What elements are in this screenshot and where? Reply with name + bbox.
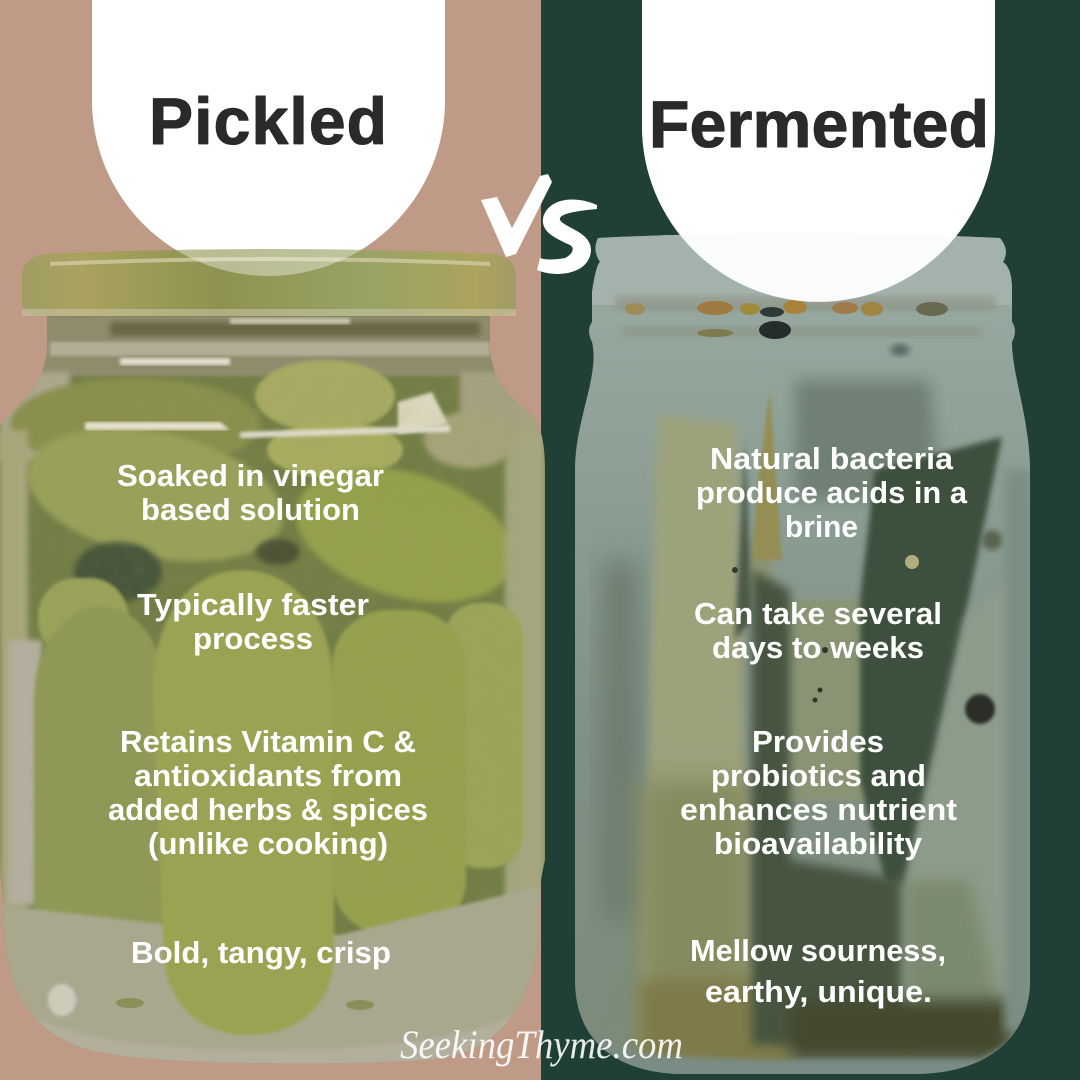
neck haze [590,235,1015,305]
right dark spear [860,437,1002,885]
pickled nutrition: Retains Vitamin C & [120,724,416,759]
glass highlights [85,422,230,430]
spices in neck [615,296,995,356]
long center pickle [153,570,334,1035]
pale overlay where jar overlaps title shape [642,0,995,302]
white title shape: fermented [642,0,995,302]
fermented method [696,441,968,544]
pickled nutrition [108,724,428,861]
left and right edge glass [0,430,28,910]
left glass shadow band [603,560,637,920]
fermented method: produce acids in a [696,475,968,510]
dark gaps [74,542,162,602]
pickled column text [108,458,428,970]
mottled pickle skin [123,409,410,547]
title: Pickled: Pickled [149,84,387,158]
pickled speed: process [193,621,313,656]
vertical pickles [34,606,170,936]
pickled speed: Typically faster [137,587,369,622]
pale overlay where lid overlaps title shape [92,0,445,276]
bottom seeds sediment [790,1000,1010,1060]
fermented nutrition: bioavailability [714,826,923,861]
right background panel [541,0,1080,1080]
right pale spear [905,560,1030,1000]
pickled nutrition: (unlike cooking) [148,826,388,861]
fermented jar illustration [570,225,1040,1080]
jar base lip [38,1016,512,1064]
fermented nutrition: probiotics and [711,758,926,793]
pickled nutrition: antioxidants from [134,758,402,793]
pickled method [117,458,384,527]
fermented nutrition: Provides [752,724,884,759]
centre pale spear [750,550,863,800]
website signature: SeekingThyme.com [400,1022,683,1067]
fermented speed [694,596,942,665]
fermented method: Natural bacteria [710,441,954,476]
top pickles [7,378,260,454]
gold lid [22,249,516,316]
pale left spear [644,412,747,968]
pickled nutrition: added herbs & spices [108,792,428,827]
neck glass [40,316,500,376]
pickled method: based solution [141,492,360,527]
fermented flavor [690,933,946,1009]
dark spear band [752,570,905,1045]
haze block behind spears [795,380,940,500]
pickled flavor: Bold, tangy, crisp [131,935,391,970]
fermented method: brine [785,509,858,544]
pickled method: Soaked in vinegar [117,458,384,493]
peppercorn [965,694,995,724]
fermented flavor: Mellow sourness, [690,933,946,968]
left background panel [0,0,541,1080]
right edge glass [1005,470,1031,1030]
lower brine band [3,886,540,1064]
jar contents [0,316,545,1080]
VS brush lettering [481,174,597,274]
fermented speed: days to weeks [712,630,924,665]
upper-left small pickle [36,576,129,644]
fermented flavor: earthy, unique. [705,974,932,1009]
pickled speed [137,587,369,656]
fermented column text [680,441,968,1009]
white title shape: pickled [92,0,445,276]
pickled jar illustration [0,249,545,1080]
title: Fermented: Fermented [649,87,989,161]
jar glass bottom [594,1040,1008,1074]
fermented nutrition [680,724,957,861]
fermented nutrition: enhances nutrient [680,792,957,827]
fermented speed: Can take several [694,596,942,631]
